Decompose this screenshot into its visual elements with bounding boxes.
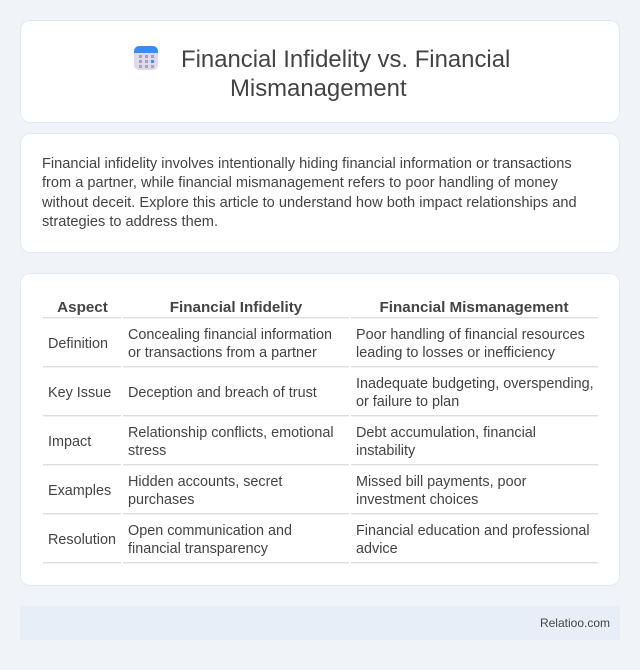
row: impact: Impact	[48, 434, 91, 450]
text block: introduction: strategies to address them.	[42, 214, 218, 230]
text block: introduction: without deceit. Explore this article to understand how both impact relationships and	[42, 195, 577, 211]
row: definition: or transactions from a partner	[128, 345, 317, 361]
text block: introduction: from a partner, while financial mismanagement refers to poor handling of money	[42, 175, 558, 191]
row: key issue: Deception and breach of trust	[128, 385, 317, 401]
row: resolution: financial transparency	[128, 541, 268, 557]
row: resolution	[48, 523, 590, 557]
row: examples: Hidden accounts, secret	[128, 474, 282, 490]
title	[181, 46, 510, 102]
row: resolution: Financial education and professional	[356, 523, 590, 539]
footer	[20, 606, 620, 640]
row: key issue: Key Issue	[48, 385, 111, 401]
title: Mismanagement	[230, 75, 407, 102]
panel: header	[20, 20, 620, 123]
row: impact	[48, 425, 536, 459]
row: definition: Concealing financial information	[128, 327, 332, 343]
table header row: Financial Infidelity	[170, 299, 302, 316]
panel: introduction	[20, 133, 620, 253]
row: impact: stress	[128, 443, 166, 459]
row: examples: Examples	[48, 483, 111, 499]
row: definition: leading to losses or inefficiency	[356, 345, 555, 361]
icon: calendar	[134, 46, 158, 70]
panel: comparison table	[20, 273, 620, 586]
text block: introduction: Financial infidelity involves intentionally hiding financial information or transactions	[42, 156, 572, 172]
row: resolution: advice	[356, 541, 398, 557]
row: resolution: Open communication and	[128, 523, 292, 539]
row: examples: investment choices	[356, 492, 478, 508]
row: definition: Poor handling of financial resources	[356, 327, 585, 343]
row: examples	[48, 474, 526, 508]
row: impact: Debt accumulation, financial	[356, 425, 536, 441]
text block: introduction	[42, 156, 577, 230]
table header row	[43, 299, 598, 319]
row: definition	[48, 327, 585, 361]
row: key issue: Inadequate budgeting, overspending,	[356, 376, 594, 392]
table header row: Aspect	[57, 299, 108, 316]
row: definition: Definition	[48, 336, 108, 352]
row: resolution: Resolution	[48, 532, 116, 548]
row: impact: Relationship conflicts, emotional	[128, 425, 334, 441]
row: examples: Missed bill payments, poor	[356, 474, 526, 490]
table header row: Financial Mismanagement	[379, 299, 569, 316]
row: key issue	[48, 376, 594, 410]
row: examples: purchases	[128, 492, 194, 508]
title: Financial Infidelity vs. Financial	[181, 46, 510, 73]
row: key issue: or failure to plan	[356, 394, 459, 410]
footer brand text: Relatioo.com	[540, 616, 610, 630]
row: impact: instability	[356, 443, 415, 459]
